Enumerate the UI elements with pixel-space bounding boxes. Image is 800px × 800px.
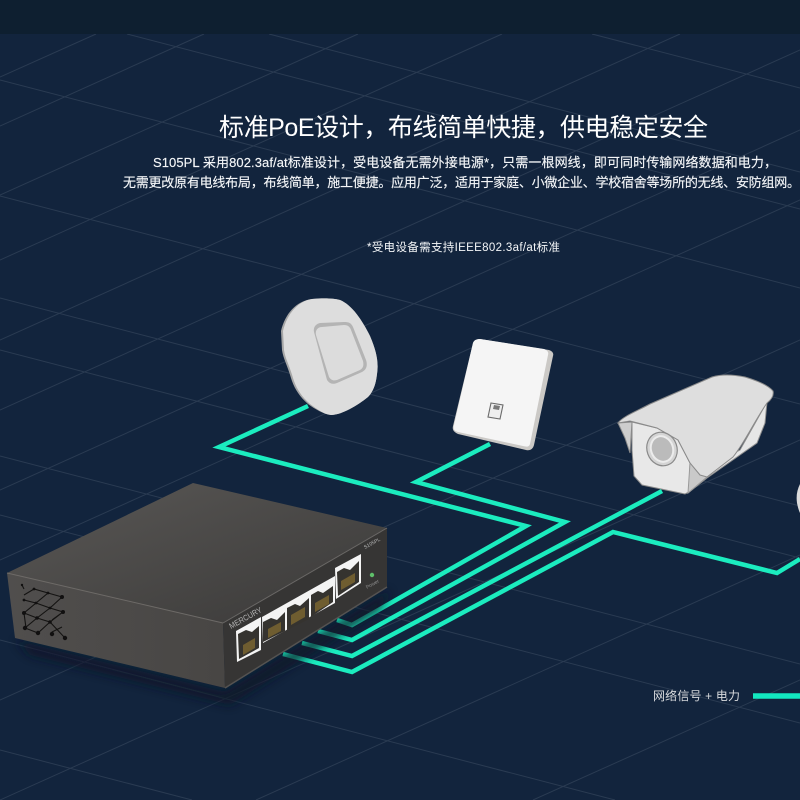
description text: 无需更改原有电线布局，布线简单，施工便捷。应用广泛，适用于家庭、小微企业、学校宿舍等场所的无线、安防组网。 — [123, 175, 800, 190]
switch top face — [7, 483, 387, 623]
power label: Power — [365, 578, 381, 591]
wire: right-edge device — [283, 532, 800, 672]
description text: S105PL 采用802.3af/at标准设计，受电设备无需外接电源*，只需一根网线，即可同时传输网络数据和电力， — [153, 155, 777, 170]
power LED — [370, 573, 374, 577]
title: 标准PoE设计，布线简单快捷，供电稳定安全 — [219, 114, 708, 142]
model label: S105PL — [363, 537, 382, 551]
ethernet ports — [236, 554, 361, 662]
icon: ceiling access point — [281, 298, 378, 415]
footnote: *受电设备需支持IEEE802.3af/at标准 — [367, 240, 560, 254]
switch side face with vents — [7, 573, 225, 688]
description text — [123, 155, 800, 190]
icon: partial device at right edge — [797, 484, 800, 513]
icon: wall access point — [453, 339, 553, 450]
legend swatch — [753, 693, 800, 699]
legend label: 网络信号 + 电力 — [653, 688, 740, 703]
switch front face — [223, 528, 387, 688]
switch shadow — [15, 590, 390, 705]
brand label: MERCURY — [228, 605, 264, 631]
wire: wall access point — [318, 444, 565, 640]
wire: ceiling access point — [219, 406, 526, 625]
network switch — [7, 483, 387, 688]
wire: camera — [302, 491, 662, 656]
teal network and power wires — [219, 406, 800, 672]
icon: bullet camera — [618, 375, 773, 494]
